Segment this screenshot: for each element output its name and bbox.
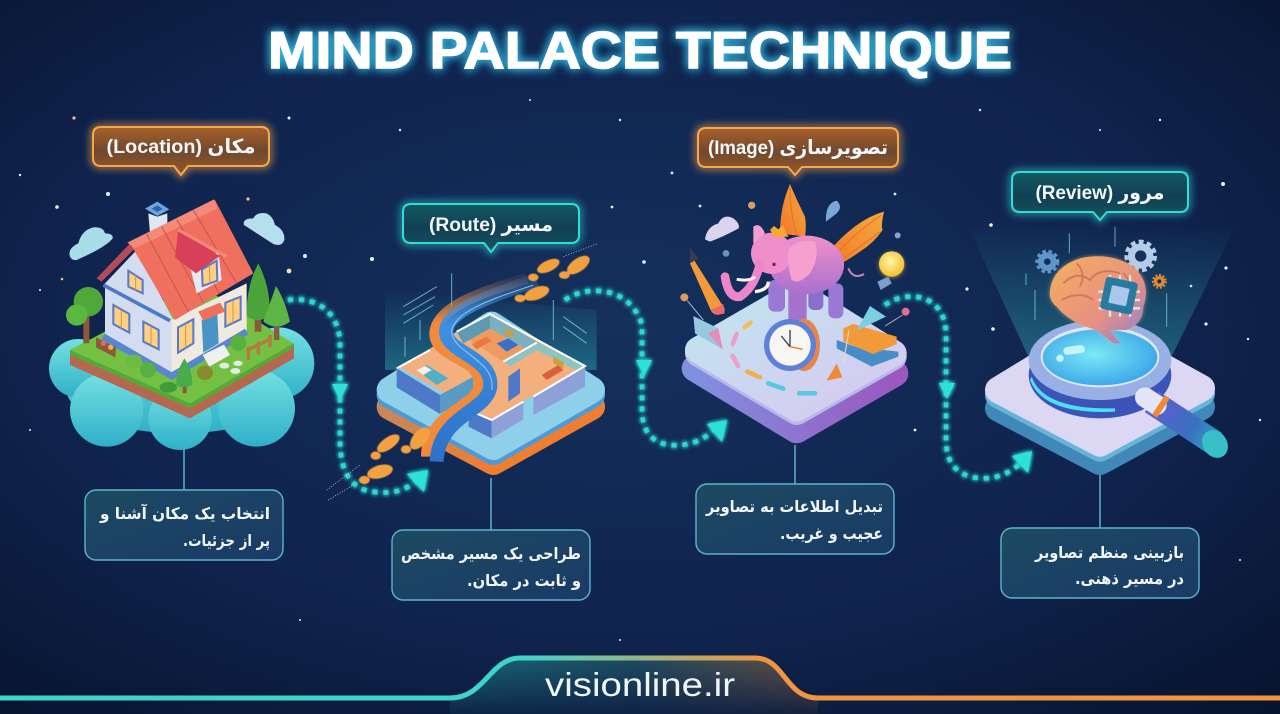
heading: review bbox=[1012, 172, 1188, 220]
description box: پر از جزئیات. bbox=[183, 531, 270, 551]
panel: route step bbox=[327, 204, 598, 600]
title: MIND PALACE TECHNIQUE bbox=[268, 22, 1012, 80]
description box bbox=[85, 490, 283, 560]
illustration: house on floating island bbox=[49, 199, 314, 450]
heading: image: تصویرسازی (Image) bbox=[708, 137, 888, 159]
arrow: image to review bbox=[885, 297, 1032, 478]
arrow: route to image bbox=[565, 291, 727, 445]
heading: review: مرور (Review) bbox=[1036, 182, 1164, 204]
illustration: magnifying glass and brain bbox=[967, 223, 1237, 463]
connector line bbox=[1099, 475, 1101, 528]
description box: و ثابت در مکان. bbox=[467, 571, 581, 590]
heading: location: مکان (Location) bbox=[107, 136, 256, 158]
panel: image step bbox=[680, 128, 910, 554]
illustration: winged elephant on clock bbox=[680, 184, 910, 430]
description box: بازبینی منظم تصاویر bbox=[1034, 543, 1184, 562]
brand text: visionline.ir bbox=[545, 666, 735, 703]
heading: route bbox=[403, 204, 579, 252]
description box bbox=[1001, 528, 1199, 598]
heading: route: مسیر (Route) bbox=[429, 214, 553, 236]
description box bbox=[392, 530, 590, 600]
background stars bbox=[19, 99, 1261, 641]
description box: انتخاب یک مکان آشنا و bbox=[99, 503, 270, 523]
connector line bbox=[794, 445, 796, 484]
heading: location bbox=[93, 127, 269, 175]
panel: review step bbox=[967, 172, 1237, 598]
illustration: isometric floor plan with path bbox=[327, 243, 598, 500]
heading: image bbox=[698, 128, 898, 175]
description box: در مسیر ذهنی. bbox=[1075, 569, 1184, 588]
panel: location step bbox=[49, 127, 314, 560]
arrow: location to route bbox=[288, 299, 428, 492]
description box bbox=[696, 484, 894, 554]
description box: تبدیل اطلاعات به تصاویر bbox=[705, 497, 883, 516]
connector line bbox=[183, 445, 185, 490]
description box: عجیب و غریب. bbox=[780, 524, 883, 543]
connector line bbox=[490, 478, 492, 530]
description box: طراحی یک مسیر مشخص bbox=[401, 544, 581, 563]
footer brand band bbox=[0, 658, 1280, 714]
